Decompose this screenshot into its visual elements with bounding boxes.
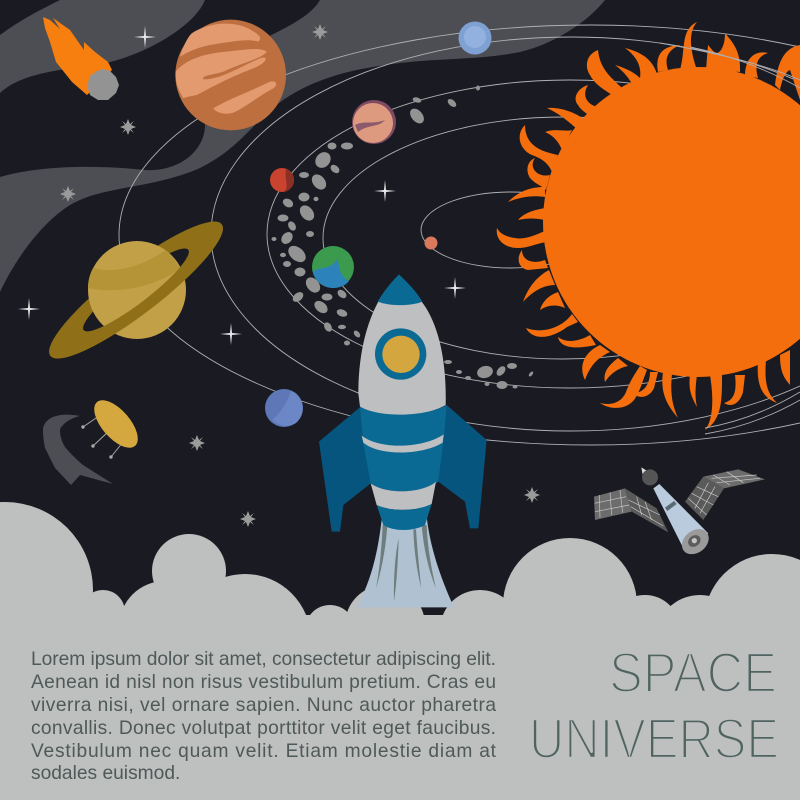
- fins: [319, 405, 487, 532]
- light stripe: [362, 434, 444, 453]
- asteroid belt: [272, 86, 534, 389]
- star field: [18, 24, 540, 527]
- body text: convallis. Donec volutpat porttitor velit eget faucibus.: [31, 718, 496, 739]
- blue section: [360, 405, 447, 491]
- sun: [497, 22, 800, 430]
- lower silver band: [371, 482, 436, 510]
- exhaust: [357, 517, 454, 607]
- planet: brown: [352, 100, 396, 144]
- solar panels: [594, 469, 765, 532]
- body text: Lorem ipsum dolor sit amet, consectetur adipiscing elit.: [31, 649, 496, 670]
- body text: sodales euismod.: [31, 763, 180, 784]
- nozzle: [377, 504, 432, 530]
- body text: [31, 649, 497, 784]
- porthole: [375, 328, 426, 380]
- orbit lines over sun flames: [660, 43, 800, 434]
- comet: [43, 17, 119, 100]
- satellite: [594, 467, 765, 559]
- planet: blue top: [458, 22, 492, 54]
- telescope body: [641, 467, 714, 559]
- swoosh: [43, 415, 113, 485]
- nebula band: [0, 0, 605, 292]
- title: SPACE: [609, 641, 777, 705]
- planet: saturn: [36, 205, 236, 375]
- body: [358, 302, 446, 415]
- planet: neptune: [265, 389, 303, 427]
- body text: viverra nisi, vel ornare sapien. Nunc auctor pharetra: [31, 695, 496, 716]
- nose cone: [378, 274, 422, 305]
- planet: mercury: [424, 236, 438, 250]
- title: [529, 641, 779, 771]
- rocket: [319, 274, 487, 607]
- planet: earth: [312, 246, 354, 288]
- orbits: [119, 25, 800, 445]
- body text: Aenean id nisl non risus vestibulum pretium. Cras eu: [31, 672, 496, 693]
- ufo: [82, 393, 146, 458]
- body text: Vestibulum nec quam velit. Etiam molestie diam at: [31, 741, 497, 762]
- clouds: [0, 502, 800, 800]
- planet: red: [270, 168, 294, 192]
- planet: jupiter: [175, 20, 286, 130]
